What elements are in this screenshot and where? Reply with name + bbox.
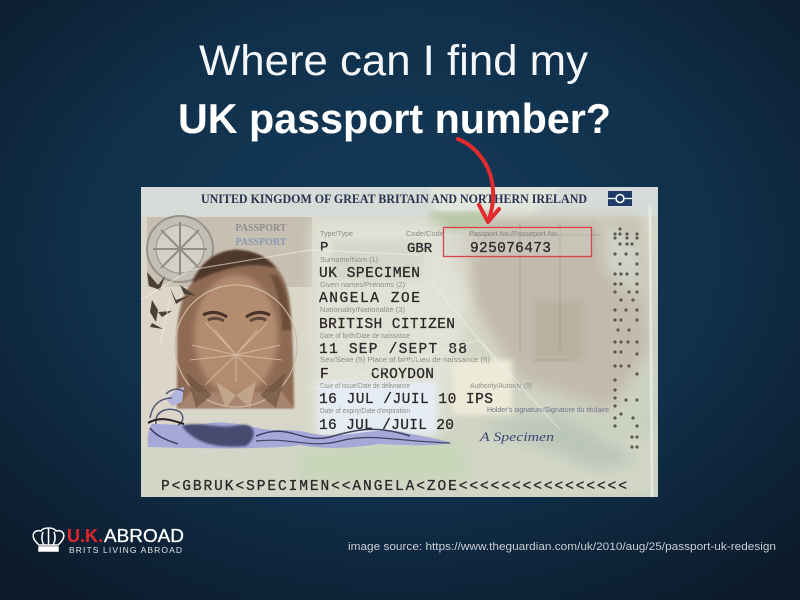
passport fields: Authority/Autorité (9)	[470, 383, 532, 390]
passport fields: CROYDON	[371, 367, 434, 383]
panel: passport image	[120, 187, 658, 497]
passport fields: 16 JUL /JUIL 20	[319, 418, 454, 434]
crease lines	[141, 250, 560, 430]
passport fields: Nationality/Nationalité (3)	[320, 307, 405, 314]
signature: A Specimen	[479, 429, 554, 444]
machine readable zone: P<GBRUK<SPECIMEN<<ANGELA<ZOE<<<<<<<<<<<<<<<<	[161, 479, 627, 495]
perforated number	[615, 229, 637, 447]
passport fields: GBR	[407, 241, 433, 257]
biometric symbol	[608, 191, 632, 206]
passport word labels	[236, 224, 286, 245]
passport fields: F	[320, 367, 329, 383]
icon: crown	[33, 528, 64, 551]
passport word labels: PASSPORT	[235, 223, 287, 234]
passport background tints	[120, 187, 658, 497]
title: UK passport number?	[178, 95, 611, 142]
passport fields: UK SPECIMEN	[319, 266, 420, 282]
arrow	[458, 139, 499, 222]
passport emblem	[147, 216, 213, 282]
passport fields: Date of expiry/Date d'expiration	[320, 408, 410, 415]
passport fields: 11 SEP /SEPT 88	[319, 342, 467, 358]
title: Where can I find my	[199, 37, 588, 85]
passport fields: Surname/Nom (1)	[320, 257, 378, 264]
wave ornament	[148, 387, 452, 448]
passport word labels: PASSPORT	[235, 237, 287, 248]
birds	[147, 272, 196, 329]
logo wordmark: U.K.	[67, 525, 103, 546]
logo tagline: BRITS LIVING ABROAD	[69, 545, 182, 555]
passport number highlight: Passport No./Passeport No.	[469, 229, 559, 238]
photo: portrait	[175, 250, 297, 408]
passport fields: Type/Type	[320, 231, 353, 238]
logo	[33, 525, 184, 555]
passport fields: Holder's signature/Signature du titulaire	[487, 407, 609, 414]
passport header: UNITED KINGDOM OF GREAT BRITAIN AND NORTHERN IRELAND	[201, 191, 587, 206]
passport number highlight: 925076473	[470, 241, 551, 257]
passport fields: Date of birth/Date de naissance	[320, 333, 410, 340]
passport base	[141, 187, 658, 497]
logo: ABROAD	[104, 525, 184, 546]
passport fields: BRITISH CITIZEN	[319, 317, 455, 333]
image source: image source: https://www.theguardian.com/uk/2010/aug/25/passport-uk-redesign	[348, 541, 776, 553]
passport fields: Sex/Sexe (5) Place of birth/Lieu de naissance (6)	[320, 357, 490, 364]
passport fields	[319, 231, 609, 434]
passport fields: P	[320, 240, 328, 256]
passport fields: Code/Code	[406, 231, 444, 238]
passport fields: ANGELA ZOE	[319, 291, 420, 307]
passport fields: 16 JUL /JUIL 10 IPS	[319, 392, 493, 408]
passport number highlight	[444, 228, 592, 257]
passport fields: Given names/Prénoms (2)	[320, 282, 405, 289]
title	[178, 37, 611, 142]
passport fields: Date of issue/Date de délivrance	[320, 383, 410, 390]
